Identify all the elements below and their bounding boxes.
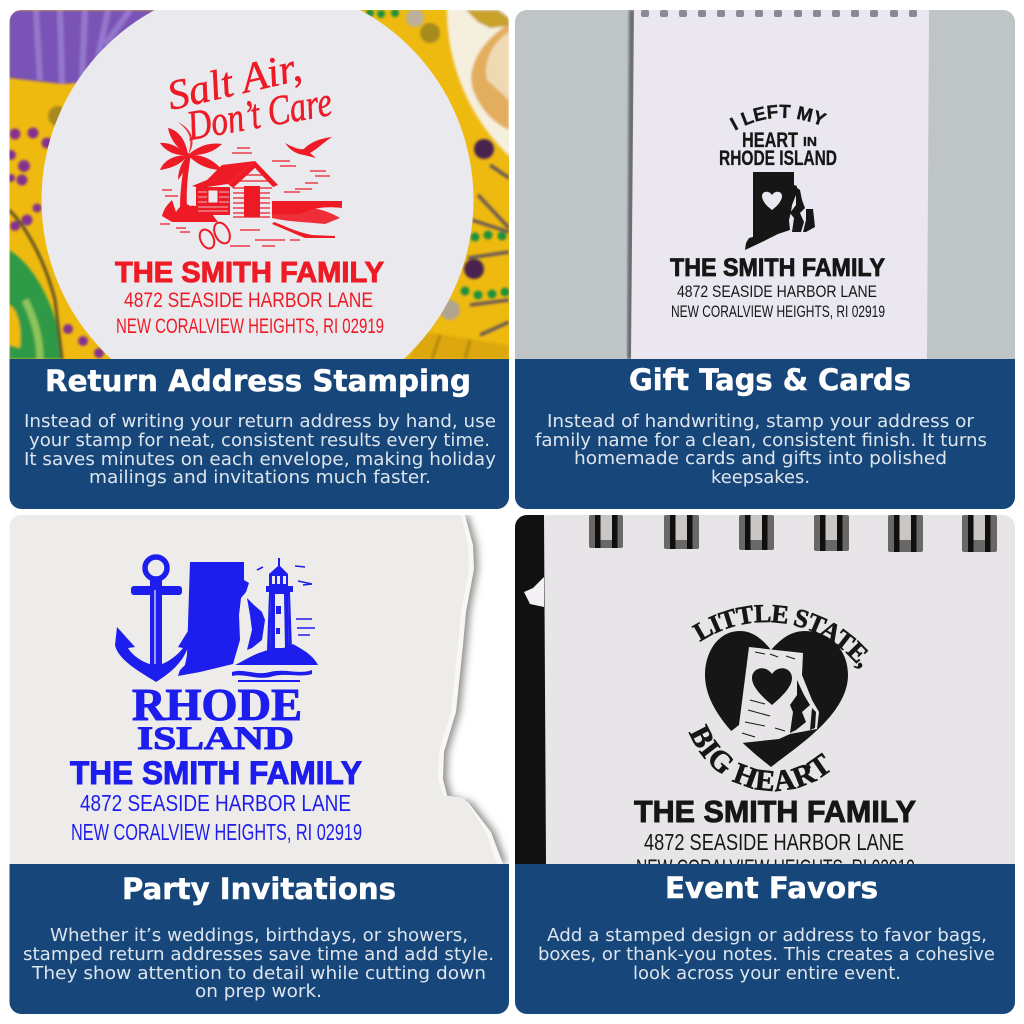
icon: lighthouse with rocks and waves bbox=[232, 558, 318, 682]
stamp: little state big heart bbox=[634, 604, 916, 864]
stamp slogan: I LEFT MY bbox=[729, 104, 828, 130]
body text: Add a stamped design or address to favor bags, bbox=[547, 926, 987, 946]
body text: look across your entire event. bbox=[633, 964, 901, 984]
stamp: city line: NEW CORALVIEW HEIGHTS, RI 02919 bbox=[671, 302, 885, 321]
stamp: curved slogan: BIG HEART bbox=[688, 723, 830, 792]
body text: Instead of handwriting, stamp your address or bbox=[547, 412, 975, 432]
stamp slogan: IN bbox=[803, 134, 817, 149]
stamp: rhode island anchor and lighthouse bbox=[70, 557, 362, 845]
panel: event favors bbox=[515, 515, 1015, 1014]
body text: It saves minutes on each envelope, making holiday bbox=[24, 450, 496, 470]
icon: anchor bbox=[115, 557, 190, 682]
stamp: family name: THE SMITH FAMILY bbox=[115, 257, 384, 289]
heading: party invitations: Party Invitations bbox=[122, 872, 396, 906]
body text: on prep work. bbox=[195, 982, 322, 1002]
heading: return address stamping: Return Address Stamping bbox=[45, 364, 471, 398]
stamp: rhode island wordmark: ISLAND bbox=[137, 721, 294, 757]
stamp: city line clipped by card: NEW CORALVIEW HEIGHTS, RI 02919 bbox=[636, 855, 915, 880]
stamp script slogan: Don’t Care bbox=[183, 79, 336, 150]
body text: boxes, or thank-you notes. This creates a cohesive bbox=[538, 945, 995, 965]
photo: spiral notebook page bbox=[515, 515, 1015, 865]
stamp slogan: HEART bbox=[742, 129, 798, 152]
body text: keepsakes. bbox=[711, 468, 810, 488]
body text: They show attention to detail while cutting down bbox=[31, 964, 486, 984]
heading: event favors: Event Favors bbox=[665, 871, 878, 905]
photo: notebook on grey background bbox=[515, 10, 1015, 360]
stamp: curved slogan: LITTLE STATE, bbox=[691, 604, 868, 669]
body text: family name for a clean, consistent finish. It turns bbox=[535, 431, 987, 451]
icon: rhode island map bbox=[178, 562, 265, 676]
body text: Instead of writing your return address by hand, use bbox=[24, 412, 496, 432]
photo: torn paper bbox=[9, 515, 510, 865]
stamp: street address: 4872 SEASIDE HARBOR LANE bbox=[677, 282, 877, 301]
stamp script slogan bbox=[163, 44, 336, 150]
stamp: family name: THE SMITH FAMILY bbox=[70, 755, 362, 791]
stamp: curved slogan bbox=[688, 604, 868, 792]
stamp: rhode island wordmark bbox=[132, 680, 302, 757]
body text bbox=[538, 926, 995, 984]
body text bbox=[23, 926, 494, 1002]
panel: party invitations bbox=[9, 515, 510, 1014]
caption card bbox=[10, 864, 509, 1014]
stamp: i left my heart in rhode island bbox=[670, 104, 886, 321]
white paper circle bbox=[42, 10, 474, 359]
heading: gift tags and cards: Gift Tags & Cards bbox=[629, 363, 911, 397]
stamp: city line: NEW CORALVIEW HEIGHTS, RI 02919 bbox=[71, 819, 362, 845]
stamp: street address: 4872 SEASIDE HARBOR LANE bbox=[80, 790, 351, 816]
body text: stamped return addresses save time and add style. bbox=[23, 945, 494, 965]
photo: mardi gras table background bbox=[10, 10, 509, 359]
stamp: city line: NEW CORALVIEW HEIGHTS, RI 02919 bbox=[116, 315, 384, 338]
caption card bbox=[515, 864, 1015, 1014]
body text: mailings and invitations much faster. bbox=[89, 468, 431, 488]
stamp: salt air don't care design bbox=[115, 44, 384, 338]
icon: heart with rhode island map bbox=[705, 631, 848, 767]
icon: rhode island map with heart bbox=[745, 172, 815, 250]
stamp slogan: RHODE ISLAND bbox=[719, 147, 837, 170]
stamp: family name: THE SMITH FAMILY bbox=[670, 254, 885, 282]
body text: homemade cards and gifts into polished bbox=[574, 449, 947, 469]
stamp: family name: THE SMITH FAMILY bbox=[634, 794, 916, 829]
stamp: street address: 4872 SEASIDE HARBOR LANE bbox=[644, 829, 904, 855]
stamp script slogan: Salt Air, bbox=[163, 44, 306, 120]
stamp: street address: 4872 SEASIDE HARBOR LANE bbox=[124, 289, 373, 312]
body text bbox=[535, 412, 987, 488]
panel: return address stamping bbox=[10, 10, 509, 509]
stamp: rhode island wordmark: RHODE bbox=[132, 680, 302, 730]
caption card bbox=[515, 359, 1015, 509]
panel: gift tags and cards bbox=[515, 10, 1015, 509]
stamp slogan bbox=[719, 104, 837, 170]
icon: palm, beach hut and gull bbox=[160, 122, 342, 251]
body text: your stamp for neat, consistent results every time. bbox=[29, 431, 490, 451]
body text bbox=[24, 412, 496, 488]
caption card bbox=[10, 359, 509, 509]
body text: Whether it’s weddings, birthdays, or showers, bbox=[50, 926, 468, 946]
